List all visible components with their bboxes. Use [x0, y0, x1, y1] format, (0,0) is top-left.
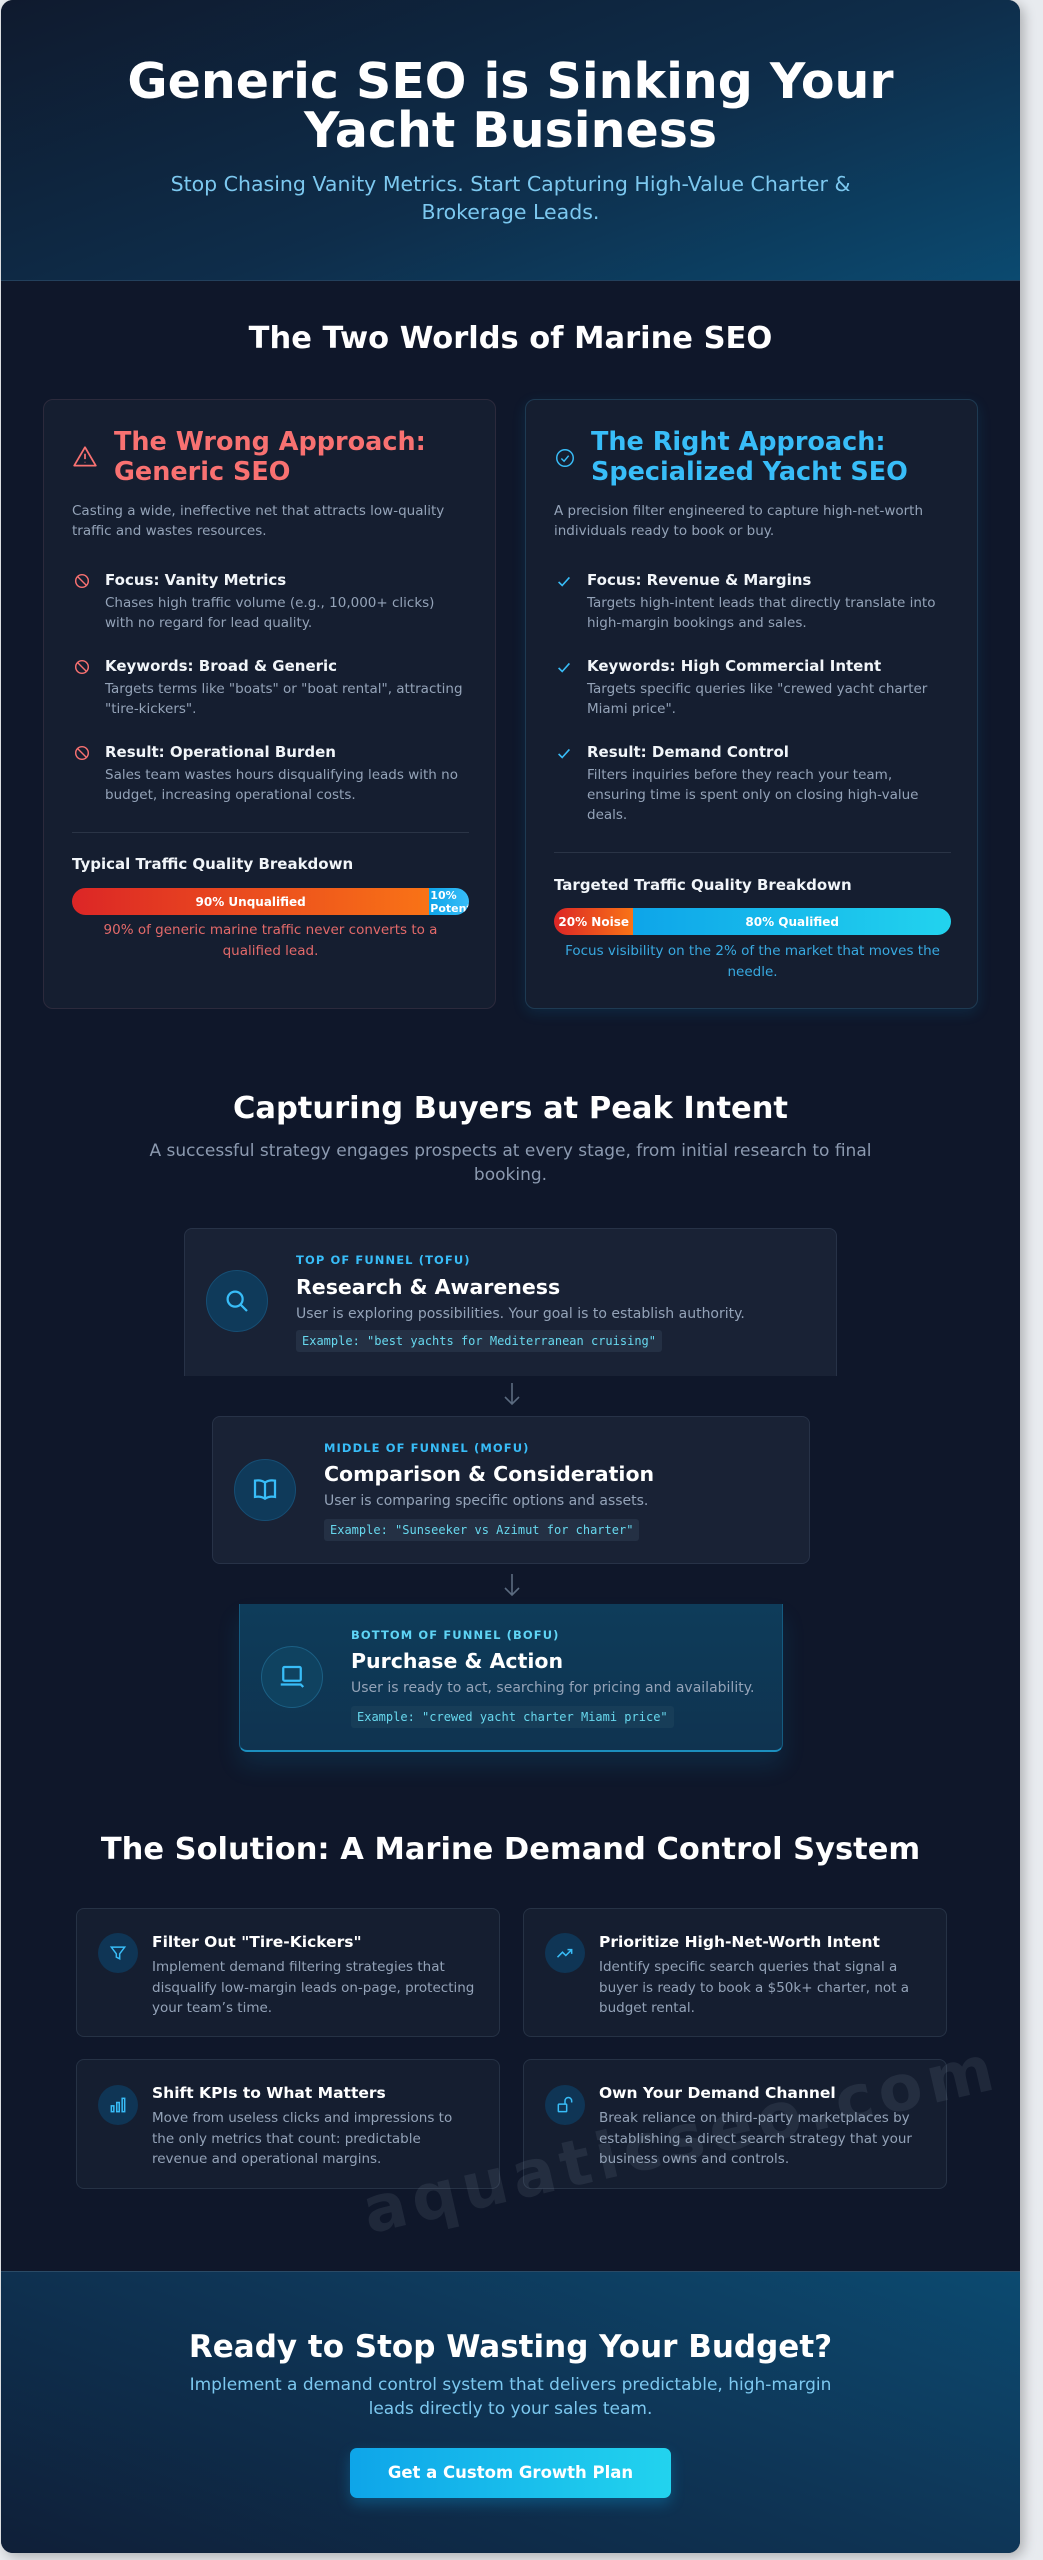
panel: right approach: Focus: Revenue & Margins: [587, 571, 811, 589]
card title: Generic SEO: [114, 457, 290, 487]
panel: wrong approach: Focus: Vanity Metrics: [105, 571, 286, 589]
CTA text: leads directly to your sales team.: [369, 2399, 652, 2419]
bar chart: targeted traffic: 80% Qualified: [745, 914, 839, 928]
subtitle: [171, 172, 850, 224]
title: [127, 53, 894, 159]
solution card: intent: budget rental.: [599, 2000, 695, 2016]
icon: book: [234, 1459, 296, 1521]
subtitle: Brokerage Leads.: [422, 200, 599, 224]
card title: The Wrong Approach:: [114, 427, 426, 457]
funnel card: TOFU: [184, 1228, 837, 1376]
panel: right approach: Miami price".: [587, 701, 676, 717]
funnel card: MOFU: Example: "Sunseeker vs Azimut for charter": [330, 1523, 633, 1537]
card description: [554, 503, 923, 539]
card description: traffic and wastes resources.: [72, 523, 267, 539]
solution card: demand channel: Own Your Demand Channel: [599, 2084, 836, 2102]
panel: wrong approach: Chases high traffic volume (e.g., 10,000+ clicks): [105, 595, 434, 611]
item: broad keywords: [75, 657, 463, 717]
funnel card: BOFU: [239, 1604, 783, 1752]
CTA section: [1, 2271, 1020, 2553]
panel: right approach: Result: Demand Control: [587, 743, 789, 761]
panel: right approach: high-margin bookings and sales.: [587, 615, 807, 631]
solution card: KPIs: Move from useless clicks and impressions to: [152, 2110, 452, 2126]
arrow: [504, 1383, 520, 1405]
funnel card: TOFU: Research & Awareness: [296, 1275, 560, 1299]
card title: The Right Approach:: [591, 427, 886, 457]
panel: right approach: [525, 399, 978, 1009]
item: commercial intent: [558, 657, 928, 717]
panel: right approach: Filters inquiries before they reach your team,: [587, 767, 892, 783]
panel: right approach: deals.: [587, 807, 627, 823]
solution card: filter: disqualify low-margin leads on-page, protecting: [152, 1980, 474, 1996]
arrow: [504, 1574, 520, 1596]
caption: Focus visibility on the 2% of the market that moves the: [565, 943, 940, 959]
funnel card: TOFU: Example: "best yachts for Mediterranean cruising": [302, 1334, 656, 1348]
item: operational burden: [75, 743, 458, 803]
panel: wrong approach: Result: Operational Burden: [105, 743, 336, 761]
icon: filter: [98, 1933, 138, 1973]
funnel card: BOFU: User is ready to act, searching for pricing and availability.: [351, 1680, 754, 1696]
solution card: filter: your team’s time.: [152, 2000, 272, 2016]
solution card: intent: Identify specific search queries that signal a: [599, 1959, 897, 1975]
subtitle: Stop Chasing Vanity Metrics. Start Capturing High-Value Charter &: [171, 172, 850, 196]
caption: needle.: [727, 964, 778, 980]
breakdown title: Typical Traffic Quality Breakdown: [72, 855, 353, 873]
funnel card: MOFU: Comparison & Consideration: [324, 1462, 654, 1486]
panel: right approach: Keywords: High Commercial Intent: [587, 657, 881, 675]
icon: warning: [73, 446, 97, 466]
title: Yacht Business: [304, 102, 717, 159]
breakdown title: Targeted Traffic Quality Breakdown: [554, 876, 852, 894]
funnel card: BOFU: BOTTOM OF FUNNEL (BOFU): [351, 1628, 560, 1642]
caption: [104, 922, 437, 959]
icon: laptop: [261, 1646, 323, 1708]
CTA text: Implement a demand control system that delivers predictable, high-margin: [190, 2375, 831, 2395]
panel: wrong approach: [43, 399, 496, 1009]
panel: right approach: Targets specific queries like "crewed yacht charter: [587, 681, 927, 697]
funnel card: BOFU: Example: "crewed yacht charter Miami price": [357, 1710, 668, 1724]
caption: 90% of generic marine traffic never converts to a: [104, 922, 437, 938]
solution card: KPIs: revenue and operational margins.: [152, 2151, 381, 2167]
bar chart: typical traffic: [72, 888, 469, 915]
solution card: KPIs: [76, 2059, 500, 2189]
icon: search: [206, 1270, 268, 1332]
funnel card: MOFU: User is comparing specific options and assets.: [324, 1493, 648, 1509]
card title: [114, 427, 426, 487]
card title: [591, 427, 908, 487]
solution card: filter: Filter Out "Tire-Kickers": [152, 1933, 362, 1951]
funnel card: BOFU: Purchase & Action: [351, 1649, 563, 1673]
panel: right approach: ensuring time is spent only on closing high-value: [587, 787, 918, 803]
section subtitle: [150, 1141, 871, 1185]
CTA button: [350, 2448, 671, 2498]
section subtitle: booking.: [474, 1165, 547, 1185]
section subtitle: A successful strategy engages prospects at every stage, from initial research to final: [150, 1141, 871, 1161]
bar chart: targeted traffic: [554, 908, 951, 935]
icon: check circle: [556, 449, 574, 467]
card description: [72, 503, 444, 539]
heading: peak intent: Capturing Buyers at Peak Intent: [233, 1091, 788, 1126]
funnel card: MOFU: MIDDLE OF FUNNEL (MOFU): [324, 1441, 530, 1455]
panel: right approach: Targets high-intent leads that directly translate into: [587, 595, 935, 611]
heading: two worlds: The Two Worlds of Marine SEO: [249, 321, 772, 356]
solution card: demand channel: [523, 2059, 947, 2189]
title: Generic SEO is Sinking Your: [127, 53, 894, 110]
funnel card: TOFU: User is exploring possibilities. Your goal is to establish authority.: [296, 1306, 745, 1322]
solution card: filter: Implement demand filtering strategies that: [152, 1959, 445, 1975]
caption: [565, 943, 940, 980]
item: vanity metrics: [75, 571, 434, 631]
bar chart: typical traffic: 10%: [430, 888, 457, 902]
panel: wrong approach: with no regard for lead quality.: [105, 615, 312, 631]
item: revenue: [558, 571, 935, 631]
card description: Casting a wide, ineffective net that attracts low-quality: [72, 503, 444, 519]
card description: A precision filter engineered to capture high-net-worth: [554, 503, 923, 519]
solution card: intent: Prioritize High-Net-Worth Intent: [599, 1933, 880, 1951]
solution card: demand channel: business owns and controls.: [599, 2151, 789, 2167]
header banner: [1, 0, 1020, 281]
panel: wrong approach: Keywords: Broad & Generic: [105, 657, 337, 675]
solution card: KPIs: Shift KPIs to What Matters: [152, 2084, 386, 2102]
funnel card: MOFU: [212, 1416, 810, 1564]
CTA title: Ready to Stop Wasting Your Budget?: [189, 2329, 832, 2365]
solution card: demand channel: establishing a direct search strategy that your: [599, 2130, 912, 2146]
watermark: aquaticseo.com: [356, 2031, 1006, 2249]
panel: wrong approach: "tire-kickers".: [105, 701, 196, 717]
panel: wrong approach: Sales team wastes hours disqualifying leads with no: [105, 767, 458, 783]
solution card: KPIs: the only metrics that count: predictable: [152, 2130, 421, 2146]
card title: Specialized Yacht SEO: [591, 457, 908, 487]
solution card: intent: [523, 1908, 947, 2037]
CTA text: [190, 2375, 831, 2419]
card description: individuals ready to book or buy.: [554, 523, 774, 539]
bar chart: targeted traffic: 20% Noise: [558, 914, 629, 928]
bar chart: typical traffic: 90% Unqualified: [196, 894, 306, 908]
solution card: demand channel: Break reliance on third-party marketplaces by: [599, 2110, 910, 2126]
caption: qualified lead.: [223, 943, 318, 959]
panel: wrong approach: Targets terms like "boats" or "boat rental", attracting: [105, 681, 463, 697]
CTA button: Get a Custom Growth Plan: [388, 2463, 633, 2482]
funnel card: TOFU: TOP OF FUNNEL (TOFU): [296, 1253, 471, 1267]
icon: chart: [98, 2085, 138, 2125]
icon: unlock: [545, 2085, 585, 2125]
solution card: intent: buyer is ready to book a $50k+ charter, not a: [599, 1980, 909, 1996]
icon: trend: [545, 1933, 585, 1973]
heading: solution: The Solution: A Marine Demand Control System: [101, 1832, 920, 1867]
item: demand control: [558, 743, 918, 823]
solution card: filter: [76, 1908, 500, 2037]
panel: wrong approach: budget, increasing operational costs.: [105, 787, 356, 803]
